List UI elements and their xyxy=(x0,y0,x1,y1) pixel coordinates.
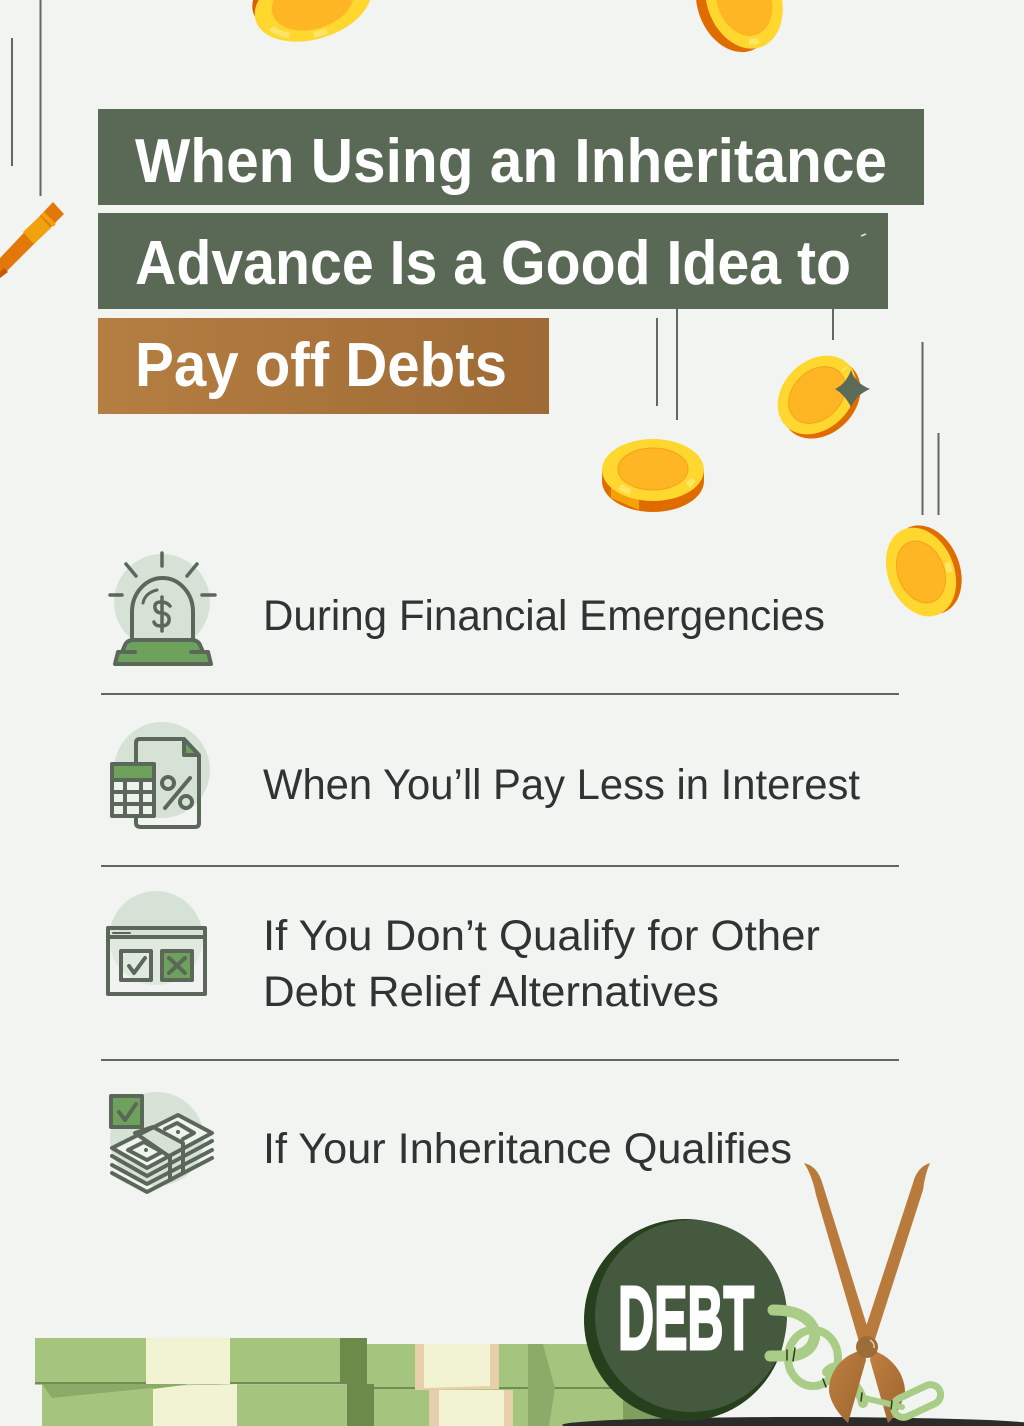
icon: alarm xyxy=(110,553,215,664)
title line 1 xyxy=(98,109,924,205)
motion line: tilted coin xyxy=(832,308,834,340)
illustration: debt ball xyxy=(584,1219,787,1421)
motion lines: right coin xyxy=(922,342,938,515)
list item: other debt relief alternatives xyxy=(108,891,820,1016)
title xyxy=(98,109,924,414)
icon: coin edge at left xyxy=(0,202,64,278)
list item: financial emergencies xyxy=(110,553,825,664)
icon: coin centre xyxy=(602,439,704,512)
icon: sparkle xyxy=(835,370,870,407)
item text: If Your Inheritance Qualifies xyxy=(263,1125,792,1173)
icon: coin upper right xyxy=(762,340,876,454)
motion lines: centre coin xyxy=(657,308,677,420)
icon: coin lower right xyxy=(873,515,974,627)
illustration: scissors cutting chain xyxy=(804,1163,930,1423)
illustration: chain behind scissors xyxy=(770,1310,863,1403)
icon: approval window xyxy=(108,891,205,994)
item text line 2: Debt Relief Alternatives xyxy=(263,968,719,1016)
item text: When You’ll Pay Less in Interest xyxy=(263,761,860,809)
icon: calculator and percent document xyxy=(112,722,210,827)
title line 3 xyxy=(98,318,549,414)
title line 2: Advance Is a Good Idea to xyxy=(135,229,851,298)
ground shadow xyxy=(562,1417,1024,1426)
list item: pay less in interest xyxy=(112,722,860,827)
list item: inheritance qualifies xyxy=(110,1092,792,1192)
debt label: DEBT xyxy=(618,1269,754,1369)
title line 3: Pay off Debts xyxy=(135,331,507,400)
item text: During Financial Emergencies xyxy=(263,592,825,640)
illustration: cash bundles xyxy=(35,1338,663,1426)
title line 1: When Using an Inheritance xyxy=(135,127,887,196)
icon: cash stack with check xyxy=(110,1092,213,1192)
icon: coin top right xyxy=(683,0,796,63)
motion lines: top left xyxy=(12,0,40,196)
icon: coin top left xyxy=(243,0,381,55)
item text: If You Don’t Qualify for Other xyxy=(263,912,820,960)
illustration: chain in front of scissors xyxy=(860,1381,944,1421)
title line 2 xyxy=(98,213,888,309)
